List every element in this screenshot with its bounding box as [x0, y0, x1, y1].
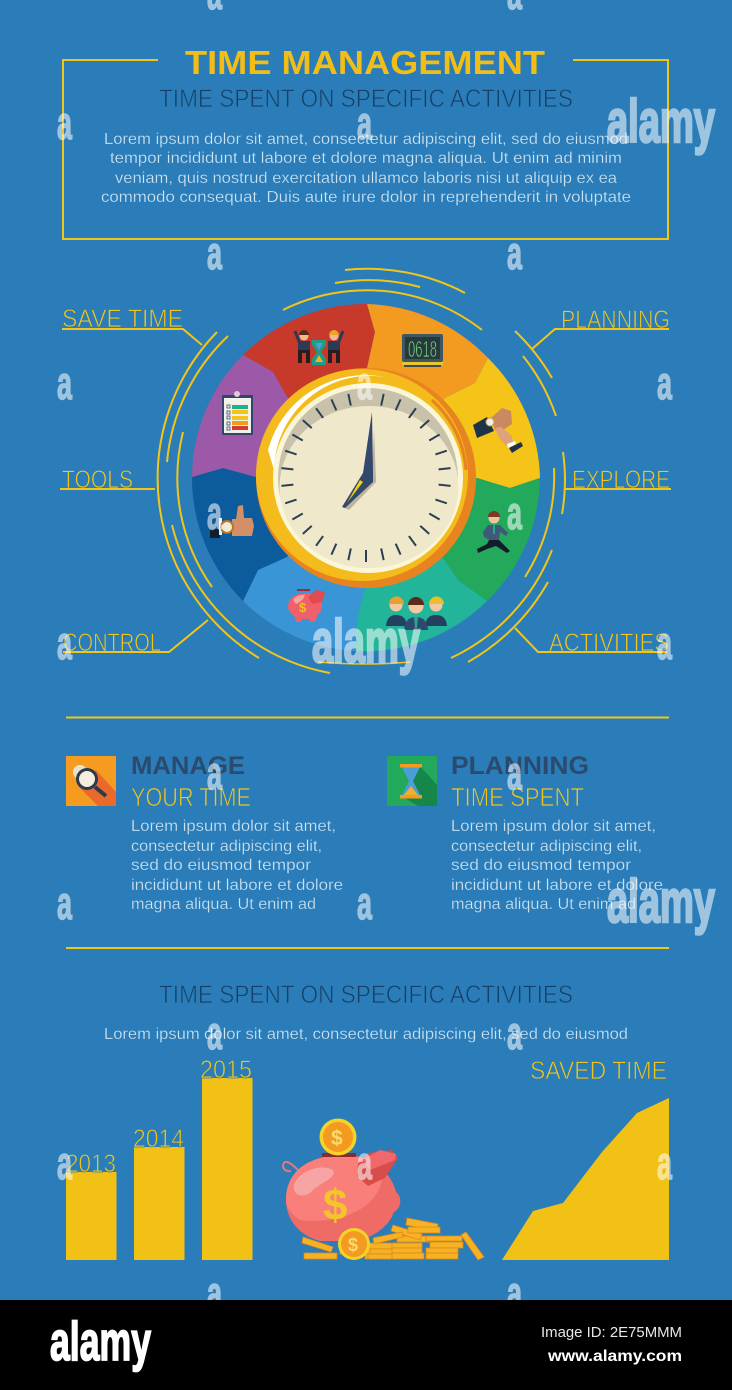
label: activities: ACTIVITIES [549, 629, 669, 657]
body text: sed do eiusmod tempor [451, 857, 632, 874]
dollar sign: $ [323, 1181, 347, 1230]
label: save time [62, 305, 202, 345]
icon: magnifier [66, 756, 116, 806]
label: planning: PLANNING [561, 306, 670, 334]
clock ticks [281, 394, 451, 562]
watermarks: a [507, 227, 522, 279]
watermarks: a [357, 877, 372, 929]
label: control: CONTROL [63, 629, 161, 657]
icon: small piggy bank: $ [299, 600, 307, 615]
watermarks: a [57, 617, 72, 669]
coin stacks [302, 1218, 484, 1260]
icon: businessmen and hourglass [295, 330, 343, 365]
piggy bank with coins [283, 1118, 484, 1260]
watermarks: a [357, 97, 372, 149]
pig tail [283, 1162, 298, 1171]
body text [131, 818, 343, 913]
segment: yellow [366, 358, 540, 488]
icon: small piggy bank [288, 589, 325, 622]
body text: Lorem ipsum dolor sit amet, [131, 818, 336, 835]
watermarks: a [507, 747, 522, 799]
icon: digital clock [402, 334, 443, 367]
watermarks: alamy [312, 608, 420, 675]
watermarks: a [657, 617, 672, 669]
watermarks: a [57, 97, 72, 149]
section heading: TIME SPENT ON SPECIFIC ACTIVITIES [159, 981, 573, 1009]
clock hands [342, 412, 376, 510]
segment: orange [366, 304, 488, 478]
intro text: tempor incididunt ut labore et dolore magna aliqua. Ut enim ad minim [110, 150, 622, 167]
label: activities [515, 628, 669, 657]
body text: consectetur adipiscing elit, [451, 838, 642, 855]
image id: Image ID: 2E75MMM [541, 1324, 682, 1341]
heading: PLANNING [451, 752, 589, 780]
label: planning [532, 306, 670, 349]
bar chart: 2013 [66, 1150, 116, 1178]
watermarks: a [207, 747, 222, 799]
area chart: saved time: SAVED TIME [530, 1057, 667, 1085]
subtitle: TIME SPENT ON SPECIFIC ACTIVITIES [159, 85, 573, 113]
body text: consectetur adipiscing elit, [131, 838, 322, 855]
intro text: veniam, quis nostrud exercitation ullamco laboris nisi ut aliquip ex ea [115, 170, 617, 187]
bar chart [66, 1056, 252, 1260]
subheading: TIME SPENT [451, 782, 584, 812]
header frame [63, 60, 668, 239]
wheel diagram [192, 304, 540, 651]
watermarks: a [207, 487, 222, 539]
body text: incididunt ut labore et dolore [131, 877, 343, 894]
watermarks: a [657, 357, 672, 409]
icon: digital clock: 0618 [408, 336, 437, 362]
watermarks: a [657, 1137, 672, 1189]
icon: three people [386, 597, 447, 630]
icon: hand checking watch [473, 408, 523, 453]
intro text: commodo consequat. Duis aute irure dolor in reprehenderit in voluptate [101, 189, 631, 206]
coin top: $ [331, 1127, 343, 1150]
body text: Lorem ipsum dolor sit amet, [451, 818, 656, 835]
segment: light blue [243, 478, 366, 651]
area chart: saved time [502, 1057, 669, 1260]
segment: teal [355, 478, 487, 651]
watermarks: a [507, 1007, 522, 1059]
watermarks: a [57, 1137, 72, 1189]
watermarks: a [357, 357, 372, 409]
decorative arcs around wheel [158, 269, 565, 673]
watermarks: a [57, 357, 72, 409]
body text [451, 818, 663, 913]
title: TIME MANAGEMENT [185, 44, 545, 81]
coin bottom [338, 1228, 370, 1260]
segment: red [243, 304, 375, 478]
watermarks: a [357, 1137, 372, 1189]
coin top [320, 1118, 356, 1156]
watermarks: a [57, 877, 72, 929]
body text: incididunt ut labore et dolore [451, 877, 663, 894]
footer logo: alamy [50, 1310, 151, 1372]
body text: sed do eiusmod tempor [131, 857, 312, 874]
label: save time: SAVE TIME [62, 305, 183, 333]
subheading: YOUR TIME [131, 782, 251, 812]
body text: magna aliqua. Ut enim ad [131, 896, 316, 913]
label: explore: EXPLORE [572, 466, 670, 494]
segment: purple [192, 355, 366, 478]
pig body [286, 1155, 400, 1241]
footer bar [0, 1300, 732, 1390]
panel: manage your time [66, 752, 343, 913]
website: www.alamy.com [547, 1348, 682, 1365]
bar chart: 2015 [200, 1056, 252, 1084]
icon: running man [477, 511, 510, 553]
coin bottom: $ [348, 1235, 358, 1255]
heading: MANAGE [131, 752, 245, 780]
bar chart: 2014 [133, 1125, 184, 1153]
watermarks: a [207, 1007, 222, 1059]
body text: magna aliqua. Ut enim ad [451, 896, 636, 913]
clock [256, 368, 476, 588]
watermarks: a [507, 1267, 522, 1319]
watermarks: a [507, 487, 522, 539]
panel: planning time spent [387, 752, 663, 913]
icon: hourglass [387, 756, 437, 806]
segment: dark blue [192, 468, 366, 601]
intro text [101, 131, 631, 206]
intro text: Lorem ipsum dolor sit amet, consectetur adipiscing elit, sed do eiusmod [104, 131, 628, 148]
pig snout [357, 1150, 398, 1186]
label: tools: TOOLS [62, 466, 133, 494]
section text: Lorem ipsum dolor sit amet, consectetur adipiscing elit, sed do eiusmod [104, 1026, 628, 1043]
segment: green [366, 478, 540, 601]
icon: thumbs up with watch [210, 505, 254, 538]
watermarks: a [207, 1267, 222, 1319]
icon: clipboard [222, 391, 253, 435]
label: control [63, 620, 208, 657]
watermarks: a [207, 227, 222, 279]
